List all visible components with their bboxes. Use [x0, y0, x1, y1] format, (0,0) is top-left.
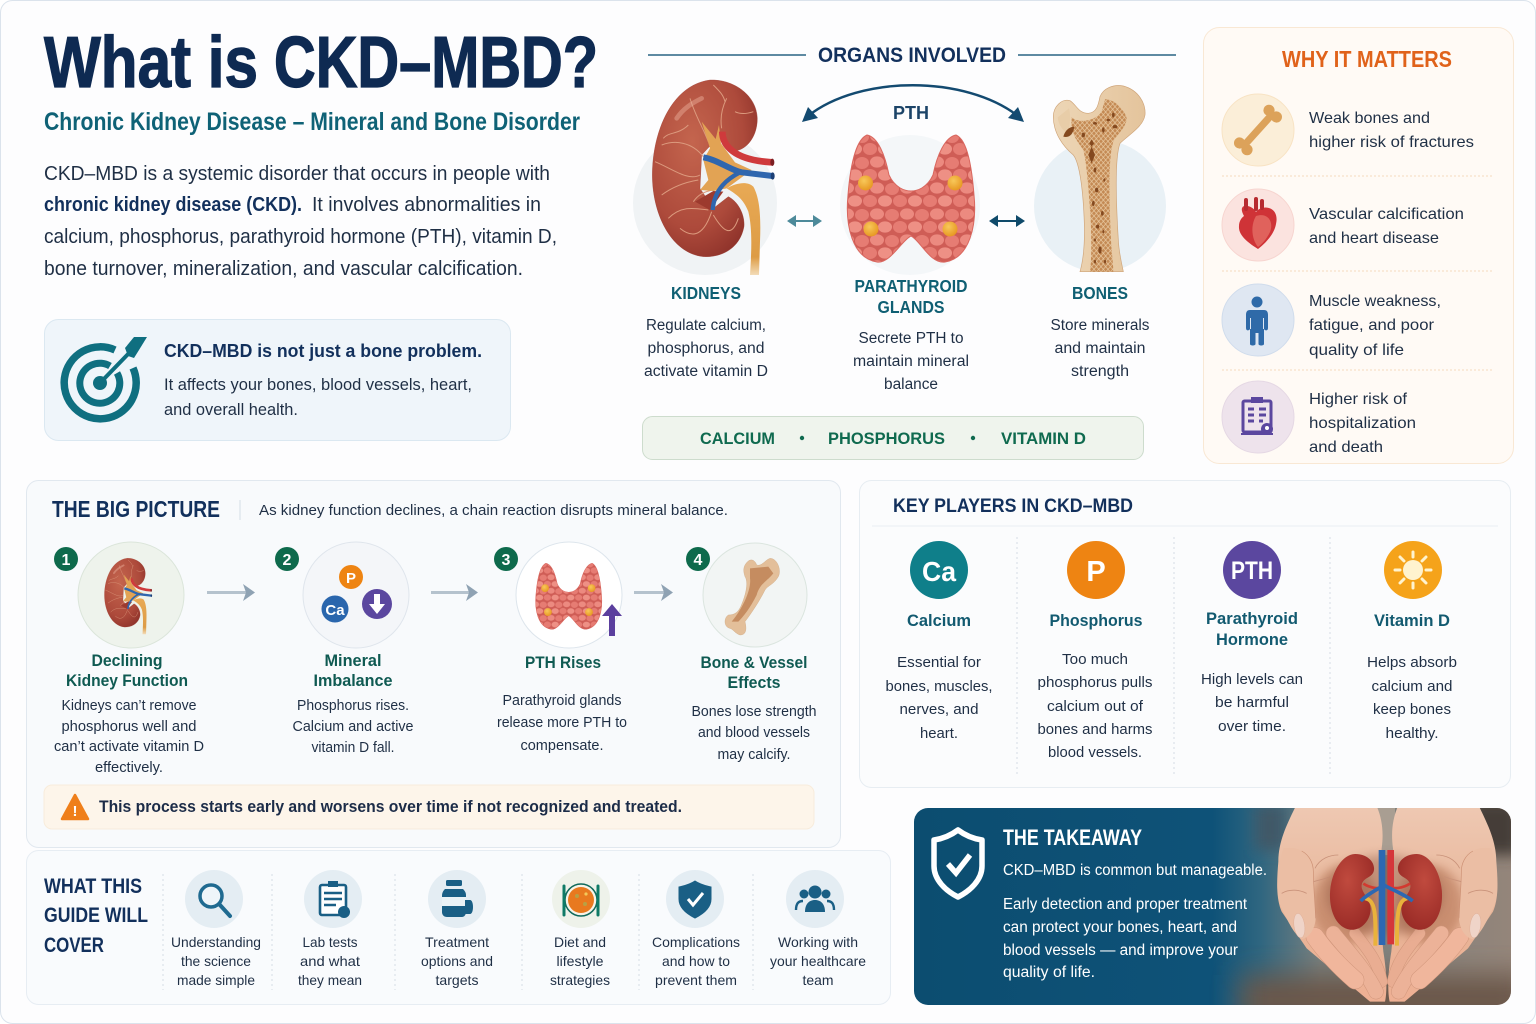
topic: complications: and how to [662, 953, 730, 969]
player: parathyroid hormone: High levels can [1201, 671, 1303, 688]
panel: why it matters [1204, 28, 1514, 464]
organ text: kidneys: KIDNEYS [671, 283, 741, 303]
player: vitamin D: calcium and [1372, 678, 1452, 695]
reason: hospitalization: Higher risk of [1309, 391, 1408, 408]
intro paragraph [44, 163, 557, 280]
topic: diet and lifestyle: strategies [550, 972, 610, 988]
callout text: CKD–MBD is not just a bone problem. [164, 341, 482, 361]
arrow: parathyroid to bones [989, 215, 1025, 227]
step 3: PTH rises: release more PTH to [497, 715, 627, 731]
big picture intro text: As kidney function declines, a chain reaction disrupts mineral balance. [259, 502, 728, 519]
icon: heart [1222, 189, 1294, 261]
intro paragraph: CKD–MBD is a systemic disorder that occurs in people with [44, 163, 550, 185]
takeaway text: blood vessels — and improve your [1003, 942, 1238, 959]
reason: weak bones: higher risk of fractures [1309, 134, 1474, 151]
heading: the big picture: THE BIG PICTURE [52, 496, 220, 522]
organ text: bones [1050, 283, 1150, 380]
organ text: parathyroid glands: Secrete PTH to [858, 330, 964, 347]
intro paragraph: chronic kidney disease (CKD). [44, 194, 302, 216]
mineral bar [642, 416, 1144, 460]
topic: lab tests [298, 870, 362, 988]
player: phosphorus: P [1086, 556, 1106, 588]
step 3: PTH rises: PTH Rises [525, 654, 601, 672]
step 2: mineral imbalance: Ca [325, 602, 345, 619]
player: phosphorus: Too much [1062, 651, 1128, 668]
player: parathyroid hormone: PTH [1231, 557, 1273, 585]
mineral bar: VITAMIN D [1001, 429, 1086, 448]
step 1: declining kidney function: can’t activate vitamin D [54, 739, 204, 755]
title block [44, 23, 598, 136]
takeaway text: CKD–MBD is common but manageable. [1003, 862, 1267, 879]
player: phosphorus: bones and harms [1038, 721, 1152, 738]
arrow: step 3 to 4 [634, 584, 673, 601]
reason: muscle weakness: quality of life [1309, 342, 1404, 359]
player: parathyroid hormone: be harmful [1215, 694, 1289, 711]
topic: healthcare team: team [802, 972, 834, 988]
icon: person [1222, 284, 1294, 356]
mineral bar: CALCIUM [700, 429, 775, 448]
player: calcium: nerves, and [900, 701, 978, 718]
player: parathyroid hormone: over time. [1218, 718, 1286, 735]
takeaway text: Early detection and proper treatment [1003, 896, 1248, 913]
heading: key players: KEY PLAYERS IN CKD–MBD [893, 496, 1133, 517]
arrow: step 1 to 2 [207, 584, 255, 601]
player: parathyroid hormone: Parathyroid [1206, 609, 1298, 628]
organ: kidney illustration [633, 80, 777, 275]
topic: understanding the science: Understanding [171, 934, 261, 950]
intro paragraph: It involves abnormalities in [312, 194, 541, 216]
topic: understanding the science: the science [181, 953, 251, 969]
organ text: parathyroid glands: maintain mineral [853, 353, 969, 370]
organ text: bones: Store minerals [1050, 317, 1150, 334]
illustration: hands holding kidneys [1222, 808, 1511, 1005]
reason: vascular calcification [1309, 206, 1464, 247]
topic: treatment options: targets [436, 972, 478, 988]
organ text: kidneys: phosphorus, and [648, 340, 764, 357]
organ text: bones: and maintain [1054, 340, 1146, 357]
topic: complications: Complications [652, 934, 740, 950]
subtitle: Chronic Kidney Disease – Mineral and Bone Disorder [44, 108, 580, 136]
topic: healthcare team [770, 870, 866, 988]
topic: lab tests: and what [300, 953, 360, 969]
organ text: kidneys: activate vitamin D [644, 363, 768, 380]
topic: treatment options [421, 870, 493, 988]
step 4: bone and vessel effects: Bone & Vessel [700, 654, 808, 672]
warning bar [44, 785, 814, 829]
warning bar: ! [72, 803, 78, 820]
step 4: bone and vessel effects [686, 543, 816, 763]
player: phosphorus: phosphorus pulls [1038, 674, 1152, 691]
heading: why it matters: WHY IT MATTERS [1282, 46, 1452, 72]
player: vitamin D: healthy. [1386, 725, 1438, 742]
organ text: bones: BONES [1072, 283, 1128, 303]
takeaway text: quality of life. [1003, 964, 1095, 981]
step 2: mineral imbalance: 2 [283, 552, 292, 569]
heading: what this guide will cover [44, 875, 148, 957]
topic: treatment options: Treatment [425, 934, 489, 950]
reason: vascular calcification: and heart disease [1309, 230, 1439, 247]
step 4: bone and vessel effects: Bones lose strength [692, 704, 816, 720]
reason: weak bones: Weak bones and [1309, 110, 1430, 127]
heading: organs involved: ORGANS INVOLVED [818, 44, 1006, 67]
icon: hospital clipboard [1222, 381, 1294, 453]
step 4: bone and vessel effects: 4 [694, 552, 703, 569]
intro paragraph: bone turnover, mineralization, and vascular calcification. [44, 258, 523, 280]
player: phosphorus: Phosphorus [1050, 611, 1142, 630]
heading: what this guide will cover: WHAT THIS [44, 875, 142, 898]
organ: parathyroid illustration [840, 135, 980, 275]
player: phosphorus: calcium out of [1047, 698, 1144, 715]
panel: what this guide will cover [26, 850, 890, 1004]
reason: muscle weakness [1309, 293, 1441, 359]
player: phosphorus: blood vessels. [1048, 744, 1142, 761]
player: calcium: Essential for [897, 654, 981, 671]
organ text: parathyroid glands [853, 276, 969, 393]
topic: healthcare team: your healthcare [770, 953, 866, 969]
topic: treatment options: options and [421, 953, 493, 969]
step 2: mineral imbalance: Calcium and active [292, 719, 414, 735]
organ text: kidneys [644, 283, 768, 380]
step 1: declining kidney function: phosphorus well and [62, 719, 196, 735]
icon: target [64, 337, 147, 419]
reason: muscle weakness: fatigue, and poor [1309, 317, 1435, 334]
step 1: declining kidney function: Kidney Function [66, 672, 188, 690]
step 1: declining kidney function: Declining [92, 652, 162, 670]
panel: organs involved [633, 44, 1176, 460]
arrow: step 2 to 3 [431, 584, 478, 601]
player: calcium [886, 541, 992, 742]
organ text: kidneys: Regulate calcium, [646, 317, 766, 334]
player: phosphorus [1038, 541, 1152, 761]
step 3: PTH rises: Parathyroid glands [502, 693, 622, 709]
step 4: bone and vessel effects: may calcify. [718, 747, 790, 763]
player: parathyroid hormone: Hormone [1216, 630, 1288, 649]
player: vitamin D: Vitamin D [1374, 611, 1450, 630]
panel: the big picture [26, 480, 840, 848]
player: calcium: Ca [922, 556, 956, 587]
callout: not just a bone problem: It affects your bones, blood vessels, heart, [164, 376, 472, 394]
step 2: mineral imbalance: Phosphorus rises. [297, 698, 409, 714]
warning bar: This process starts early and worsens over time if not recognized and treated. [99, 797, 682, 816]
icon: shield [934, 830, 982, 897]
takeaway text: THE TAKEAWAY [1003, 825, 1142, 850]
step 4: bone and vessel effects: Effects [728, 674, 780, 692]
icon: bone [1222, 94, 1294, 166]
label: PTH: PTH [893, 103, 929, 123]
reason: weak bones [1309, 110, 1474, 151]
topic: diet and lifestyle [550, 870, 610, 988]
topic: healthcare team: Working with [778, 934, 858, 950]
organ text: bones: strength [1071, 363, 1129, 380]
organ text: parathyroid glands: GLANDS [878, 297, 944, 317]
step 2: mineral imbalance [275, 542, 414, 756]
title: CKD–MBD? [274, 23, 598, 103]
player: calcium: bones, muscles, [886, 678, 992, 695]
step 2: mineral imbalance: Imbalance [314, 672, 392, 690]
reason: hospitalization: and death [1309, 439, 1383, 456]
arrow: PTH arc [802, 85, 1024, 122]
topic: understanding the science [171, 870, 261, 988]
topic: lab tests: Lab tests [302, 934, 358, 950]
step 1: declining kidney function: Kidneys can’t remove [62, 698, 196, 714]
topic: complications: prevent them [655, 972, 737, 988]
mineral bar: PHOSPHORUS [828, 429, 945, 448]
step 3: PTH rises: compensate. [520, 738, 604, 754]
organ text: parathyroid glands: balance [884, 376, 938, 393]
arrow: kidneys to parathyroid [787, 215, 822, 227]
intro paragraph: calcium, phosphorus, parathyroid hormone (PTH), vitamin D, [44, 226, 557, 248]
step 1: declining kidney function: 1 [62, 552, 71, 569]
panel: key players [860, 480, 1510, 788]
player: calcium: heart. [920, 725, 958, 742]
topic: understanding the science: made simple [177, 972, 255, 988]
player: parathyroid hormone [1201, 541, 1303, 735]
takeaway text: can protect your bones, heart, and [1003, 919, 1237, 936]
takeaway text [1003, 825, 1267, 981]
heading: what this guide will cover: GUIDE WILL [44, 904, 148, 927]
topic: diet and lifestyle: lifestyle [556, 953, 604, 969]
organ text: parathyroid glands: PARATHYROID [854, 276, 968, 296]
reason: hospitalization [1309, 391, 1416, 456]
topic: lab tests: they mean [298, 972, 362, 988]
heading: what this guide will cover: COVER [44, 934, 104, 957]
step 1: declining kidney function [54, 542, 204, 776]
topic: diet and lifestyle: Diet and [554, 934, 606, 950]
step 1: declining kidney function: effectively. [95, 760, 163, 776]
step 2: mineral imbalance: vitamin D fall. [312, 740, 394, 756]
organ: bone illustration [1034, 86, 1166, 272]
callout: not just a bone problem [44, 320, 510, 440]
reason: hospitalization: hospitalization [1309, 415, 1416, 432]
callout: not just a bone problem: and overall health. [164, 401, 298, 419]
title: What is [44, 23, 258, 103]
player: vitamin D: keep bones [1373, 701, 1451, 718]
step 2: mineral imbalance: Mineral [324, 652, 382, 670]
step 3: PTH rises: 3 [502, 552, 511, 569]
panel: the takeaway [914, 808, 1511, 1005]
reason: vascular calcification: Vascular calcification [1309, 206, 1464, 223]
player: calcium: Calcium [907, 611, 971, 630]
step 4: bone and vessel effects: and blood vessels [698, 725, 810, 741]
player: vitamin D: Helps absorb [1367, 654, 1457, 671]
reason: muscle weakness: Muscle weakness, [1309, 293, 1441, 310]
title [44, 23, 598, 103]
step 3: PTH rises [494, 542, 627, 754]
player: vitamin D [1367, 541, 1457, 742]
topic: complications [652, 870, 740, 988]
step 2: mineral imbalance: P [346, 570, 356, 587]
